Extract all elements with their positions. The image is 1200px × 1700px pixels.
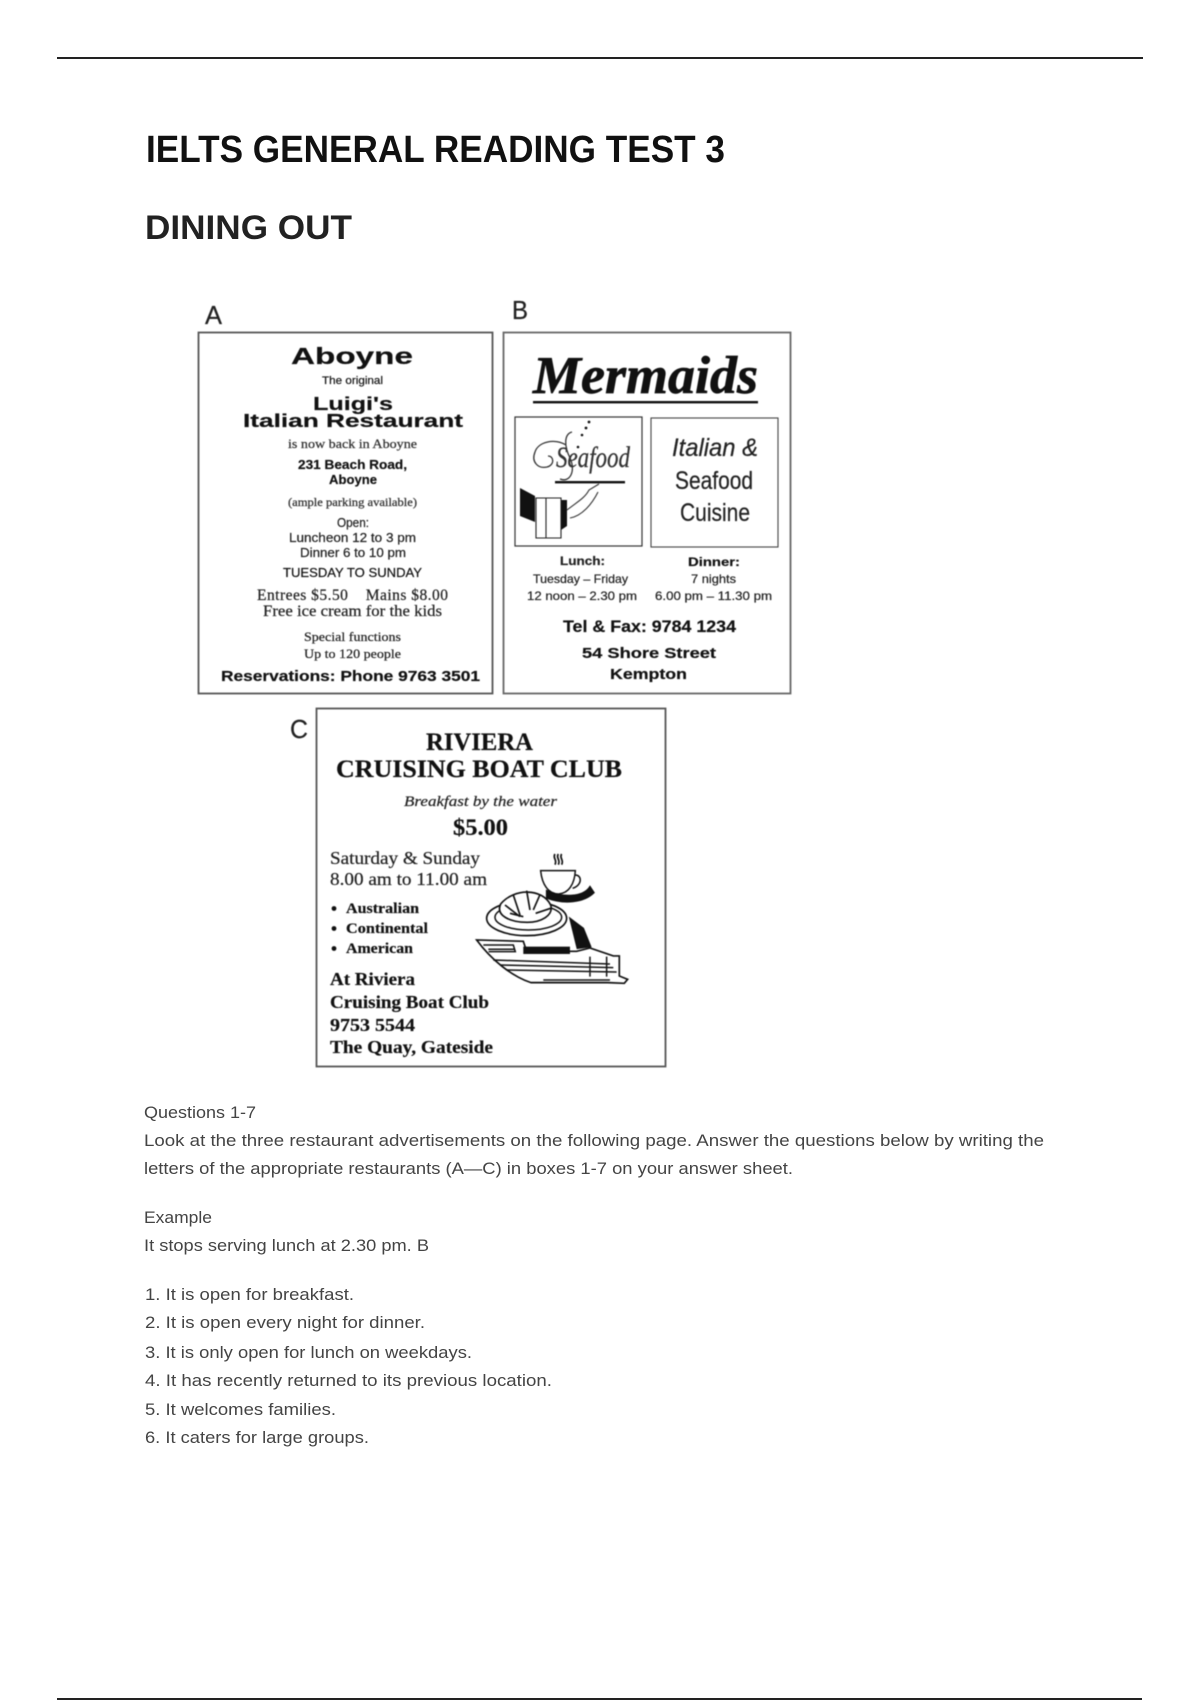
text block: example: It stops serving lunch at 2.30 pm. B: [144, 1236, 429, 1255]
ad B dinner hours: Dinner:: [688, 555, 740, 569]
ad C heading: [336, 729, 622, 840]
ad A opening hours: [283, 516, 422, 580]
ad C breakfast options: Continental: [346, 921, 428, 937]
text block: example: Example: [144, 1208, 212, 1227]
ad C breakfast options: Australian: [346, 901, 420, 917]
ad A address: (ample parking available): [288, 497, 417, 509]
text block: example: [144, 1208, 429, 1255]
ad B contact: Tel & Fax: 9784 1234: [563, 617, 737, 636]
ad A opening hours: Luncheon 12 to 3 pm: [289, 530, 416, 545]
ad B cuisine box: [651, 418, 778, 547]
ad B logo: Mermaids: [532, 347, 758, 405]
text block: instructions: Questions 1-7: [144, 1103, 256, 1122]
ad A frame: [198, 332, 492, 694]
ad C heading: RIVIERA: [426, 729, 533, 756]
ad A opening hours: Dinner 6 to 10 pm: [300, 545, 406, 560]
ad C heading: $5.00: [453, 815, 508, 840]
ad A functions: [304, 630, 401, 661]
ad A heading: [243, 343, 463, 431]
ad C contact: Cruising Boat Club: [330, 992, 489, 1012]
text block: instructions: Look at the three restaurant advertisements on the following page. Answer the questions below by writing the: [144, 1131, 1044, 1150]
ad A prices: [257, 587, 448, 620]
ad C breakfast options: [332, 901, 428, 957]
label C: C: [290, 714, 308, 744]
ad C heading: Breakfast by the water: [404, 794, 557, 810]
ad A address: is now back in Aboyne: [288, 436, 417, 451]
ad A heading: Italian Restaurant: [243, 411, 463, 431]
ad B contact: [563, 617, 737, 683]
ad B dinner hours: 7 nights: [691, 572, 736, 586]
panel: advertisement B, Mermaids: [504, 295, 790, 694]
ad B lunch hours: Tuesday – Friday: [533, 572, 628, 586]
text block: questions list: 1. It is open for breakfast.: [145, 1285, 354, 1304]
ad A heading: Aboyne: [291, 343, 413, 369]
text block: instructions: letters of the appropriate restaurants (A—C) in boxes 1-7 on your answer sheet.: [144, 1159, 793, 1178]
ad C hours: 8.00 am to 11.00 am: [330, 869, 487, 889]
ad C heading: CRUISING BOAT CLUB: [336, 756, 622, 783]
ad B frame: [504, 332, 790, 694]
icon: waiter hand with seafood tray: [515, 417, 642, 546]
ad C contact: 9753 5544: [330, 1015, 415, 1035]
ad A functions: Up to 120 people: [304, 647, 401, 661]
text block: questions list: 3. It is only open for lunch on weekdays.: [145, 1343, 472, 1362]
ad B cuisine box: Seafood: [675, 467, 753, 495]
ad C contact: The Quay, Gateside: [330, 1037, 493, 1057]
text block: instructions: [144, 1103, 1044, 1178]
text block: questions list: 5. It welcomes families.: [145, 1400, 336, 1419]
text block: questions list: [145, 1285, 552, 1447]
ad A functions: Special functions: [304, 630, 401, 644]
ad C breakfast options: American: [346, 941, 414, 957]
text block: questions list: 2. It is open every night for dinner.: [145, 1313, 425, 1332]
ad C contact: [330, 969, 493, 1057]
ad C hours: [330, 848, 487, 889]
ad A reservations: Reservations: Phone 9763 3501: [221, 669, 480, 685]
ad A prices: Entrees $5.50 Mains $8.00: [257, 587, 448, 604]
text block: questions list: 6. It caters for large groups.: [145, 1428, 369, 1447]
icon: waiter hand with seafood tray: Seafood: [556, 441, 631, 474]
ad B dinner hours: 6.00 pm – 11.30 pm: [655, 589, 772, 603]
subtitle: DINING OUT: [145, 209, 352, 247]
ad A heading: The original: [322, 375, 383, 387]
ad A heading: Luigi's: [313, 394, 393, 414]
ad C frame: [316, 708, 666, 1066]
ad B lunch hours: Lunch:: [560, 554, 605, 568]
ad A opening hours: Open:: [337, 516, 369, 530]
ad A opening hours: TUESDAY TO SUNDAY: [283, 565, 422, 580]
ad B cuisine box: Italian &: [672, 434, 758, 462]
text block: questions list: 4. It has recently returned to its previous location.: [145, 1371, 552, 1390]
ad B cuisine box: Cuisine: [680, 499, 750, 527]
ad A address: 231 Beach Road,: [298, 458, 407, 472]
title: IELTS GENERAL READING TEST 3: [146, 129, 725, 171]
label B: B: [512, 295, 528, 325]
ad A prices: Free ice cream for the kids: [263, 603, 442, 620]
panel: advertisement A, Aboyne: [198, 300, 492, 694]
ad B contact: Kempton: [610, 666, 687, 683]
ad C contact: At Riviera: [330, 969, 415, 989]
label A: A: [205, 300, 223, 330]
panel: advertisement C, Riviera: [290, 708, 666, 1066]
icon: coffee, croissant and boat: [477, 854, 628, 983]
ad B lunch hours: [527, 554, 637, 603]
ad C hours: Saturday & Sunday: [330, 848, 480, 868]
ad A address: Aboyne: [329, 473, 377, 487]
ad B contact: 54 Shore Street: [582, 645, 716, 662]
ad B dinner hours: [655, 555, 772, 603]
ad B lunch hours: 12 noon – 2.30 pm: [527, 589, 637, 603]
ad A address: [288, 436, 417, 509]
